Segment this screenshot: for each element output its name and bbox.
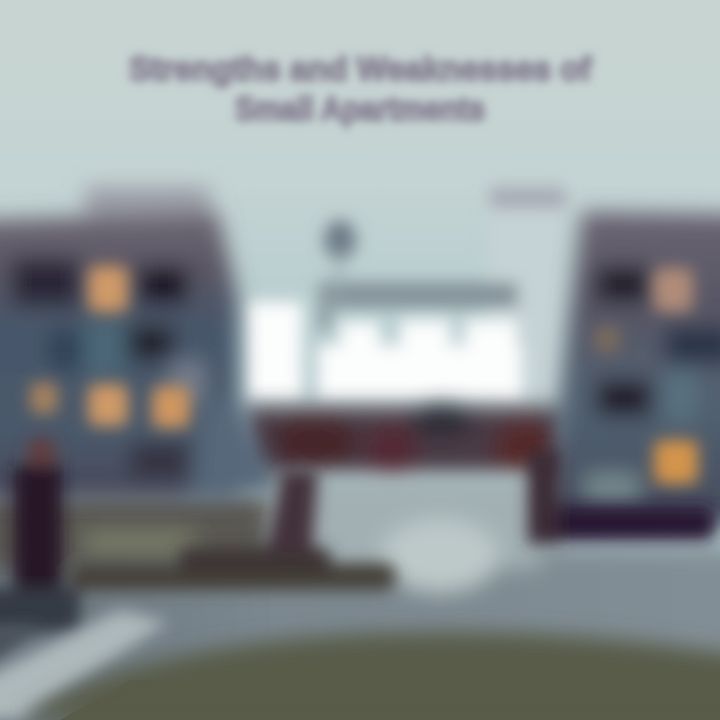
ground base layer [0, 600, 720, 720]
ground and pavement [0, 478, 720, 720]
dark hedges and figures [0, 437, 715, 632]
path bottom left [0, 610, 168, 720]
right building lit windows [594, 268, 698, 484]
lawn base under blur [60, 680, 720, 720]
left apartment building [0, 188, 278, 500]
lawn foreground [22, 632, 720, 720]
title: Strengths and Weaknesses of [129, 50, 592, 87]
dark red fence row [245, 404, 565, 478]
lawn blurred top edge [22, 632, 720, 720]
left building lit windows [30, 266, 190, 428]
title [129, 50, 592, 127]
background gate and pale tower [318, 188, 565, 400]
title: Small Apartments [235, 90, 485, 127]
right apartment building [545, 212, 720, 530]
bright white forms at centre [246, 302, 522, 401]
